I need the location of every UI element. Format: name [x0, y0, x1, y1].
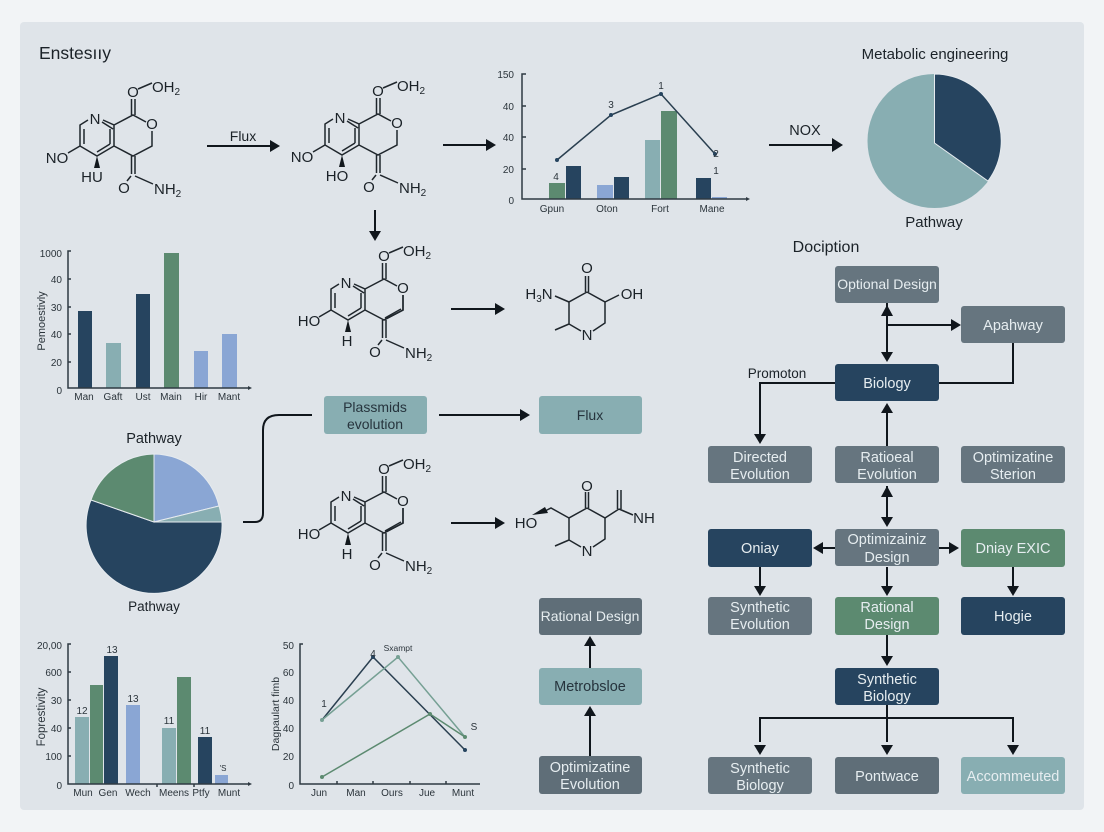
arrow: Flux: [207, 128, 280, 152]
box: Optimizatine Sterion: Optimizatine: [973, 450, 1053, 466]
molecule 4: O: [378, 461, 390, 478]
bar chart: middle left: 0: [56, 386, 62, 397]
pie chart: metabolic engineering: [868, 74, 1002, 208]
bar chart: bottom left: [36, 641, 252, 799]
box: Optimizainiz Design: [835, 529, 939, 566]
box: Plasmids evolution: [324, 396, 427, 434]
line chart: bottom: Munt: [452, 788, 474, 799]
molecule 2: [291, 78, 427, 199]
label: Pathway below pie: Pathway: [128, 599, 180, 614]
molecule 1: O: [127, 84, 139, 101]
molecule 1: OH: [152, 79, 174, 96]
molecule 5: piperidine: O: [581, 260, 593, 277]
line chart: bottom: [270, 641, 480, 799]
flow connectors: [754, 282, 1019, 755]
molecule 6: piperidine: NH: [633, 510, 655, 527]
box: Optional Design: [835, 266, 939, 303]
molecule 1: O: [118, 180, 130, 197]
connector: pie to plasmids: [243, 415, 312, 522]
molecule 1: 2: [176, 189, 182, 200]
molecule 6: piperidine: [515, 478, 655, 560]
line chart: bottom: Ours: [381, 788, 403, 799]
label: Pathway: Pathway: [905, 214, 963, 231]
box: Oniay: Oniay: [741, 541, 780, 557]
box: Accommeuted: Accommeuted: [967, 769, 1059, 785]
molecule 3: NH: [405, 345, 427, 362]
molecule 5: piperidine: N: [582, 327, 592, 344]
line chart: bottom: Dagpaulart fimb: [270, 677, 282, 751]
bar chart: bottom left: 11: [200, 726, 211, 737]
molecule 4: [298, 456, 433, 577]
arrow: molecule 4 to piperidine: [451, 517, 505, 529]
arrow: molecule 3 to piperidine: [451, 303, 505, 315]
line chart: bottom: Man: [346, 788, 366, 799]
bar chart: bottom left: Gen: [99, 788, 117, 799]
box: Flux: [539, 396, 642, 434]
box: Synthetic Biology (bottom): [708, 757, 812, 794]
box: Flux: Flux: [577, 407, 603, 423]
line chart: bottom: 40: [283, 724, 294, 735]
bar chart: middle left: Gaft: [104, 392, 123, 403]
line chart: bottom: Jun: [311, 788, 327, 799]
box: Accommeuted: [961, 757, 1065, 794]
box: Metabolsloe: [539, 668, 642, 705]
heading: Metabolic engineering: Metabolic engineering: [862, 46, 1008, 63]
combo chart: top: Gpun: [540, 204, 564, 215]
arrow: molecule 2 down: [369, 210, 381, 241]
box: Metabolsloe: Metrobsloe: [554, 679, 626, 695]
bar chart: middle left: 20: [51, 358, 62, 369]
molecule 4: 2: [427, 566, 433, 577]
molecule 4: HO: [298, 526, 320, 543]
bar chart: bottom left: 11: [164, 716, 175, 727]
line chart: bottom: 40: [283, 696, 294, 707]
box: Rational Design: Rational: [860, 600, 914, 616]
box: Optimizatine Sterion: [961, 446, 1065, 483]
bar chart: bottom left: Munt: [218, 788, 240, 799]
arrow: molecule 2 to bar chart: [443, 139, 496, 151]
molecule 4: NH: [405, 558, 427, 575]
arrow: Flux: Flux: [230, 128, 256, 144]
molecule 3: [298, 243, 433, 364]
box: Optimizatine Evolution (center flow): Evolution: [560, 777, 620, 793]
molecule 1: [46, 79, 182, 200]
molecule 4: 2: [426, 464, 432, 475]
box: Rational Design: Design: [864, 617, 910, 633]
bar chart: bottom left: Meens: [159, 788, 189, 799]
box: Biology: Biology: [863, 376, 912, 392]
bar chart: bottom left: 12: [76, 706, 88, 717]
molecule 2: O: [391, 115, 403, 132]
molecule 1: N: [90, 111, 100, 128]
line chart: bottom: 60: [283, 668, 294, 679]
bar chart: bottom left: 600: [45, 668, 62, 679]
box: Optimizatine Evolution (center flow): [539, 756, 642, 794]
bar chart: middle left: 40: [51, 275, 62, 286]
box: Pontwace: Pontwace: [855, 769, 919, 785]
bar chart: middle left: [36, 249, 252, 403]
molecule 2: OH: [397, 78, 420, 95]
molecule 3: N: [341, 275, 351, 292]
bar chart: middle left: Pemoestivly: [36, 291, 48, 351]
line chart: bottom: Sxampt: [384, 643, 413, 653]
bar chart: bottom left: 'S: [220, 764, 226, 773]
box: Apahway: [961, 306, 1065, 343]
molecule 3: H: [342, 333, 352, 350]
box: Rationeal Evolution: Ratioeal: [860, 450, 914, 466]
molecule 1: 2: [174, 87, 180, 98]
box: Dniay EXIC: Dniay EXIC: [976, 541, 1050, 557]
molecule 2: 2: [421, 188, 427, 199]
molecule 1: HU: [81, 169, 103, 186]
box: Directed Evolution: Directed: [733, 450, 787, 466]
molecule 3: O: [397, 280, 409, 297]
molecule 5: piperidine: H: [525, 286, 536, 303]
molecule 2: 2: [420, 86, 426, 97]
molecule 2: N: [335, 110, 345, 127]
molecule 2: HO: [326, 168, 348, 185]
box: Hogie: Hogie: [994, 609, 1032, 625]
pie chart: pathway: [86, 454, 222, 593]
arrow: NOX: [769, 123, 843, 152]
bar chart: middle left: Main: [160, 392, 182, 403]
molecule 3: O: [378, 248, 390, 265]
bar chart: middle left: 40: [51, 330, 62, 341]
box: Dniay EXIC: [961, 529, 1065, 567]
molecule 3: OH: [403, 243, 426, 260]
combo chart: top: 20: [503, 165, 514, 176]
combo chart: top: Oton: [596, 204, 618, 215]
heading: Dociption: Dociption: [793, 239, 859, 256]
box: Directed Evolution: [708, 446, 812, 483]
box: Synthetic Biology: Synthetic: [857, 672, 917, 688]
combo chart: top: 40: [503, 133, 514, 144]
combo chart: top: 3: [608, 100, 614, 111]
molecule 6: piperidine: HO: [515, 515, 537, 532]
molecule 5: piperidine: 3: [536, 294, 542, 305]
bar chart: bottom left: Wech: [125, 788, 151, 799]
molecule 1: NO: [46, 150, 68, 167]
molecule 4: N: [341, 488, 351, 505]
line chart: bottom: 20: [283, 752, 294, 763]
molecule 5: piperidine: OH: [621, 286, 643, 303]
arrow: up to Metabolsloe: [584, 706, 596, 756]
box: Apahway: Apahway: [983, 318, 1044, 334]
box: Optimizainiz Design: Optimizainiz: [848, 532, 926, 548]
molecule 4: O: [369, 557, 381, 574]
box: Rational Design (center flow): Rational Design: [541, 608, 639, 624]
molecule 3: O: [369, 344, 381, 361]
bar chart: middle left: Man: [74, 392, 94, 403]
heading: Enstesiiy: Enstesııy: [39, 43, 111, 63]
box: Hogie: [961, 597, 1065, 635]
molecule 5: piperidine: N: [542, 286, 553, 303]
bar chart: bottom left: Mun: [73, 788, 93, 799]
box: Synthetic Biology: Biology: [863, 689, 912, 705]
molecule 2: O: [372, 83, 384, 100]
box: Optimizainiz Design: Design: [864, 550, 910, 566]
line chart: bottom: 50: [283, 641, 294, 652]
box: Synthetic Evolution: Synthetic: [730, 600, 790, 616]
box: Rationeal Evolution: [835, 446, 939, 483]
molecule 1: NH: [154, 181, 176, 198]
molecule 2: NO: [291, 149, 313, 166]
bar chart: middle left: Hir: [195, 392, 208, 403]
box: Pontwace: [835, 757, 939, 794]
box: Synthetic Evolution: [708, 597, 812, 635]
combo chart: top: Fort: [651, 204, 669, 215]
combo chart: top: 2: [713, 149, 719, 160]
box: Synthetic Biology (bottom): Synthetic: [730, 761, 790, 777]
box: Plasmids evolution: evolution: [347, 416, 403, 432]
box: Synthetic Evolution: Evolution: [730, 617, 790, 633]
bar chart: bottom left: 13: [127, 694, 139, 705]
combo chart: top: 40: [503, 102, 514, 113]
bar chart: middle left: Mant: [218, 392, 240, 403]
bar chart: bottom left: 20,00: [37, 641, 62, 652]
line chart: bottom: Jue: [419, 788, 435, 799]
label: Pathway above pie: Pathway: [126, 431, 183, 447]
bar chart: bottom left: 13: [106, 645, 118, 656]
molecule 3: 2: [427, 353, 433, 364]
molecule 1: O: [146, 116, 158, 133]
molecule 3: HO: [298, 313, 320, 330]
box: Optimizatine Sterion: Sterion: [990, 467, 1036, 483]
bar chart: bottom left: Ptfy: [192, 788, 210, 799]
combo chart: top: 0: [508, 196, 514, 207]
combo chart: top: 4: [553, 172, 559, 183]
box: Rational Design (center flow): [539, 598, 642, 635]
molecule 3: 2: [426, 251, 432, 262]
flowchart: [708, 266, 1065, 794]
bar chart: bottom left: 40: [51, 724, 62, 735]
bar chart: middle left: 30: [51, 303, 62, 314]
combo chart: top: Mane: [699, 204, 725, 215]
molecule 6: piperidine: N: [582, 543, 592, 560]
combo chart: top: 150: [497, 70, 514, 81]
line chart: bottom: 0: [288, 781, 294, 792]
combo chart: top: [497, 70, 750, 215]
box: Oniay: [708, 529, 812, 567]
box: Rationeal Evolution: Evolution: [857, 467, 917, 483]
box: Synthetic Biology (bottom): Biology: [736, 778, 785, 794]
arrow: NOX: NOX: [789, 123, 821, 139]
bar chart: middle left: 1000: [40, 249, 62, 260]
molecule 2: NH: [399, 180, 421, 197]
arrow: up to Rational Design: [584, 636, 596, 668]
bar chart: bottom left: 0: [56, 781, 62, 792]
line chart: bottom: 4: [370, 649, 376, 660]
arrow: plasmids to flux: [439, 409, 530, 421]
box: Optional Design: Optional Design: [837, 276, 937, 292]
label: Promoton: Promoton: [748, 366, 806, 381]
combo chart: top: 1: [658, 81, 664, 92]
box: Directed Evolution: Evolution: [730, 467, 790, 483]
molecule 6: piperidine: O: [581, 478, 593, 495]
molecule 4: OH: [403, 456, 426, 473]
molecule 4: H: [342, 546, 352, 563]
bar chart: middle left: Ust: [136, 392, 151, 403]
box: Biology: [835, 364, 939, 401]
box: Plasmids evolution: Plassmids: [343, 399, 407, 415]
box: Optimizatine Evolution (center flow): Optimizatine: [550, 760, 630, 776]
line chart: bottom: 1: [321, 699, 327, 710]
combo chart: top: 1: [713, 166, 719, 177]
box: Synthetic Biology: [835, 668, 939, 705]
bar chart: bottom left: 30: [51, 696, 62, 707]
box: Rational Design: [835, 597, 939, 635]
bar chart: bottom left: Foprestivity: [36, 687, 48, 746]
line chart: bottom: S: [471, 722, 478, 733]
molecule 4: O: [397, 493, 409, 510]
molecule 5: piperidine: [525, 260, 643, 344]
bar chart: bottom left: 100: [45, 752, 62, 763]
molecule 2: O: [363, 179, 375, 196]
